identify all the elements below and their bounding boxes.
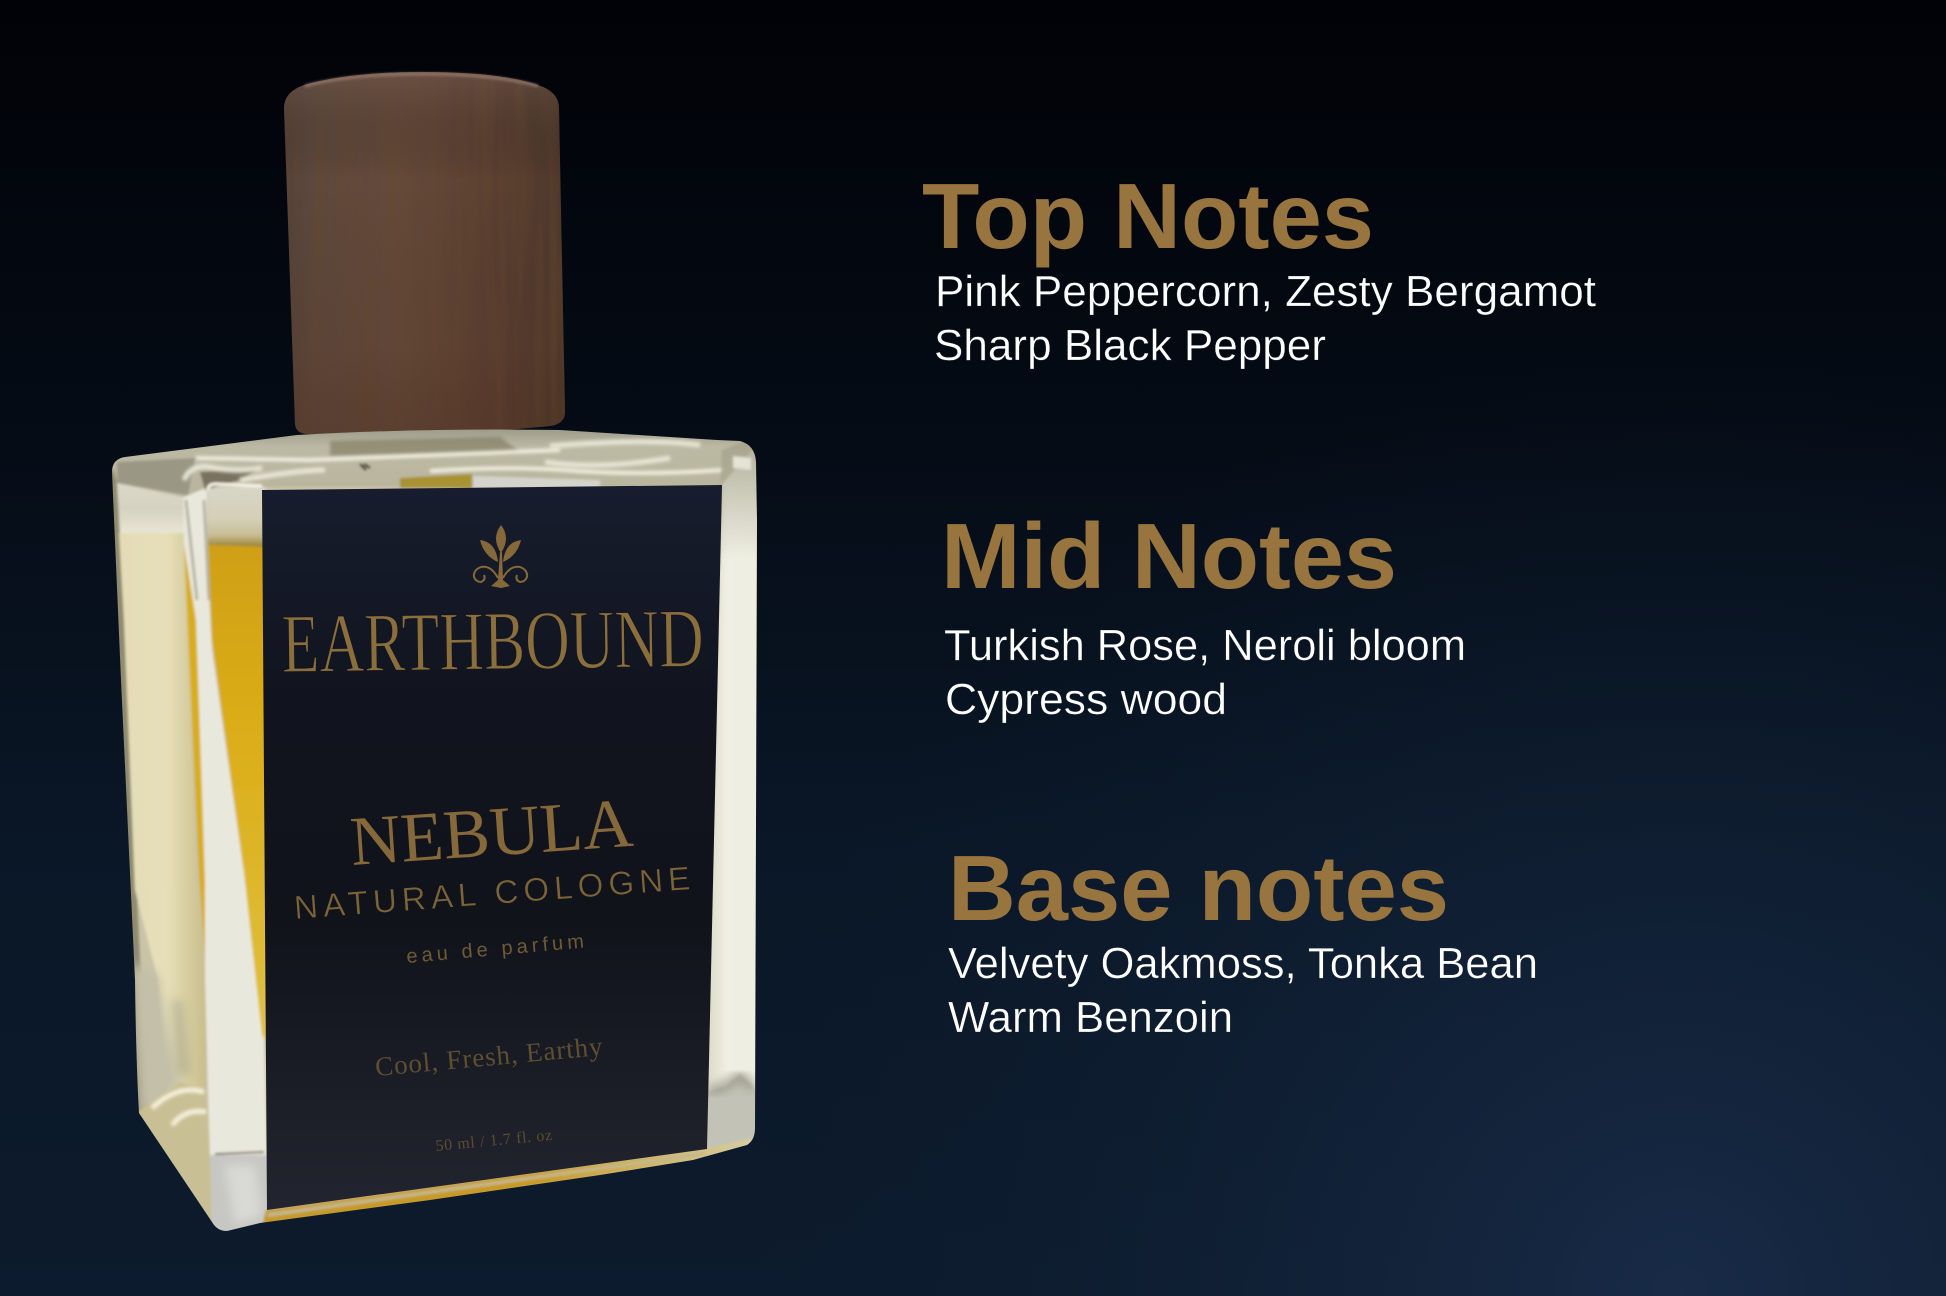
right glass xyxy=(708,450,757,1092)
window above liquid xyxy=(208,487,266,547)
shoulder highlights xyxy=(196,450,723,473)
silver lower left xyxy=(130,962,180,1118)
narrow yellow band xyxy=(184,545,207,990)
glass body xyxy=(100,420,770,1245)
descriptor: Cool, Fresh, Earthy xyxy=(374,1031,604,1082)
heading: top notes: Top Notes xyxy=(922,164,1374,268)
right lower facet xyxy=(707,1075,756,1148)
pale liquid facet xyxy=(119,533,206,1100)
text: base notes list: Velvety Oakmoss, Tonka Bean xyxy=(948,939,1538,988)
bottle label xyxy=(262,485,722,1210)
text: mid notes list: Cypress wood xyxy=(945,675,1227,724)
shoulder xyxy=(113,430,743,498)
left window above liquid xyxy=(117,483,184,535)
section: top notes xyxy=(922,164,1596,370)
wooden cap xyxy=(280,68,570,440)
brand name: EARTHBOUND xyxy=(281,592,704,691)
section: base notes xyxy=(948,836,1538,1042)
heading: mid notes: Mid Notes xyxy=(941,504,1397,608)
text: top notes list xyxy=(934,267,1596,370)
product name: NEBULA xyxy=(348,785,636,881)
perfume bottle xyxy=(100,68,770,1245)
icon: fleur emblem xyxy=(474,525,527,588)
section: mid notes xyxy=(941,504,1466,724)
left outer edge xyxy=(112,469,146,1112)
text: mid notes list: Turkish Rose, Neroli bloom xyxy=(944,621,1466,670)
main liquid xyxy=(208,545,266,1042)
bottom liquid strip xyxy=(262,1136,760,1226)
text: top notes list: Sharp Black Pepper xyxy=(934,321,1326,370)
gold reflection xyxy=(400,474,472,488)
volume: 50 ml / 1.7 fl. oz xyxy=(435,1127,553,1155)
text: base notes list: Warm Benzoin xyxy=(948,993,1233,1042)
lower left base xyxy=(139,1082,212,1219)
heading: base notes: Base notes xyxy=(948,836,1449,940)
text: base notes list xyxy=(948,939,1538,1042)
text: top notes list: Pink Peppercorn, Zesty Bergamot xyxy=(935,267,1596,316)
product type: NATURAL COLOGNE xyxy=(293,859,691,926)
glass corner pillar xyxy=(183,487,267,1157)
text: mid notes list xyxy=(944,621,1466,724)
lower corner facet xyxy=(210,1155,267,1234)
eau de parfum: eau de parfum xyxy=(406,931,585,968)
